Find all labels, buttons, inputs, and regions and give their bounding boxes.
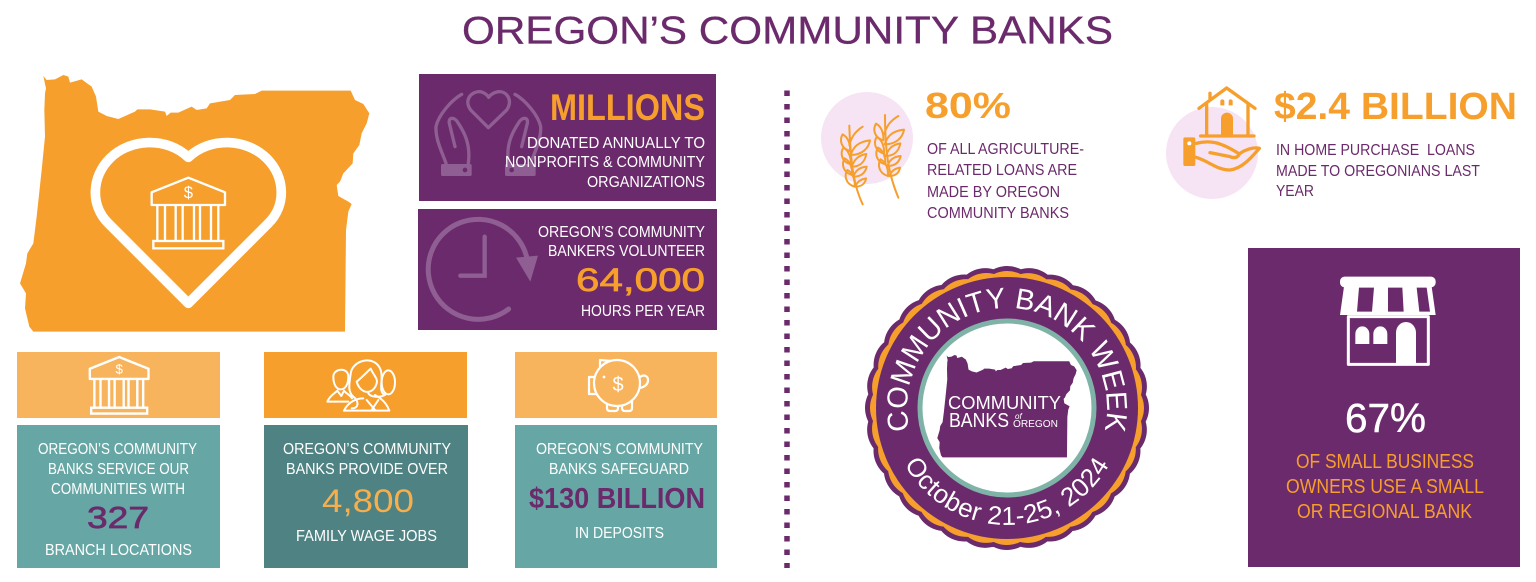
panel: family wage jobs [264, 352, 468, 568]
description: branches: BANKS SERVICE OUR [48, 461, 189, 478]
description: branches [38, 441, 197, 498]
icon: wheat on pink circle [821, 92, 913, 204]
icon: storefront [1340, 277, 1436, 364]
Oregon map with heart and bank [20, 75, 369, 332]
icon: house on hand [1166, 88, 1259, 199]
icon: piggy bank: $ [612, 374, 624, 396]
description: deposits: OREGON’S COMMUNITY [536, 441, 703, 458]
stat: 4,800: 4,800 [322, 483, 414, 519]
description: branches: OREGON’S COMMUNITY [38, 441, 197, 458]
panel: branch locations [17, 352, 220, 568]
description: jobs: OREGON’S COMMUNITY [283, 441, 451, 458]
stat: 64,000: 64,000 [576, 262, 705, 298]
badge logo text: OREGON [1013, 419, 1058, 430]
icon: bank in heart [152, 178, 225, 248]
description: volunteer: BANKERS VOLUNTEER [548, 243, 705, 260]
description: agriculture: MADE BY OREGON [927, 184, 1060, 201]
icon: hands holding heart [436, 92, 541, 176]
icon: family [327, 360, 395, 411]
description: home loans: MADE TO OREGONIANS LAST [1276, 163, 1480, 180]
block: home loans [1166, 86, 1517, 200]
Oregon state shape [20, 75, 369, 332]
title: OREGON’S COMMUNITY BANKS [462, 10, 1113, 52]
description: deposits [536, 441, 703, 478]
label: in deposits: IN DEPOSITS [575, 525, 664, 542]
description: volunteer: OREGON’S COMMUNITY [538, 224, 705, 241]
badge logo text: of [1015, 412, 1022, 421]
badge: community bank week seal [865, 266, 1149, 550]
badge logo text [948, 393, 1061, 432]
description: agriculture: OF ALL AGRICULTURE- [927, 141, 1084, 158]
panel: deposits [515, 352, 717, 568]
stat: $130 billion: $130 BILLION [529, 483, 705, 515]
description: home loans [1276, 142, 1480, 200]
icon: bank [90, 357, 149, 414]
stat: 327: 327 [87, 500, 149, 535]
description: hours: HOURS PER YEAR [581, 303, 705, 320]
description: small business: OF SMALL BUSINESS [1296, 451, 1474, 473]
badge logo text: COMMUNITY [948, 393, 1061, 413]
icon: bank: $ [115, 361, 123, 376]
icon: clock with arrow [428, 219, 538, 319]
description: branches: COMMUNITIES WITH [51, 481, 185, 498]
description: home loans: IN HOME PURCHASE LOANS [1276, 142, 1475, 159]
description: donated: NONPROFITS & COMMUNITY [505, 154, 705, 171]
description: small business: OR REGIONAL BANK [1297, 501, 1473, 523]
panel: volunteer hours [418, 209, 717, 330]
stat: millions: MILLIONS [550, 87, 705, 128]
heart outline [95, 143, 281, 303]
label: family wage jobs: FAMILY WAGE JOBS [296, 528, 437, 545]
description: deposits: BANKS SAFEGUARD [549, 461, 689, 478]
description: agriculture: RELATED LOANS ARE [927, 162, 1077, 179]
description: donated: DONATED ANNUALLY TO [527, 135, 705, 152]
stat: 67%: 67% [1345, 395, 1426, 441]
panel: millions donated [419, 74, 716, 201]
description: jobs [283, 441, 451, 478]
stat: $2.4 billion: $2.4 BILLION [1274, 86, 1517, 128]
panel: small business [1248, 248, 1520, 567]
badge curved heading: COMMUNITY BANK WEEK [887, 288, 1128, 432]
description: agriculture: COMMUNITY BANKS [927, 205, 1069, 222]
description: jobs: BANKS PROVIDE OVER [286, 461, 448, 478]
block: agriculture loans [821, 85, 1084, 222]
description: volunteer [538, 224, 705, 260]
stat: 80%: 80% [925, 85, 1011, 126]
description: donated [505, 135, 705, 191]
icon: bank in heart: $ [184, 183, 193, 202]
description: donated: ORGANIZATIONS [587, 174, 705, 191]
description: agriculture [927, 141, 1084, 222]
description: home loans: YEAR [1276, 183, 1314, 200]
description: small business [1286, 451, 1484, 523]
badge logo text: BANKS [949, 410, 1009, 432]
description: small business: OWNERS USE A SMALL [1286, 476, 1484, 498]
label: branch locations: BRANCH LOCATIONS [45, 542, 192, 559]
icon: piggy bank [589, 360, 648, 411]
badge Oregon shape [937, 355, 1077, 457]
badge dates: October 21-25, 2024 [908, 458, 1108, 525]
